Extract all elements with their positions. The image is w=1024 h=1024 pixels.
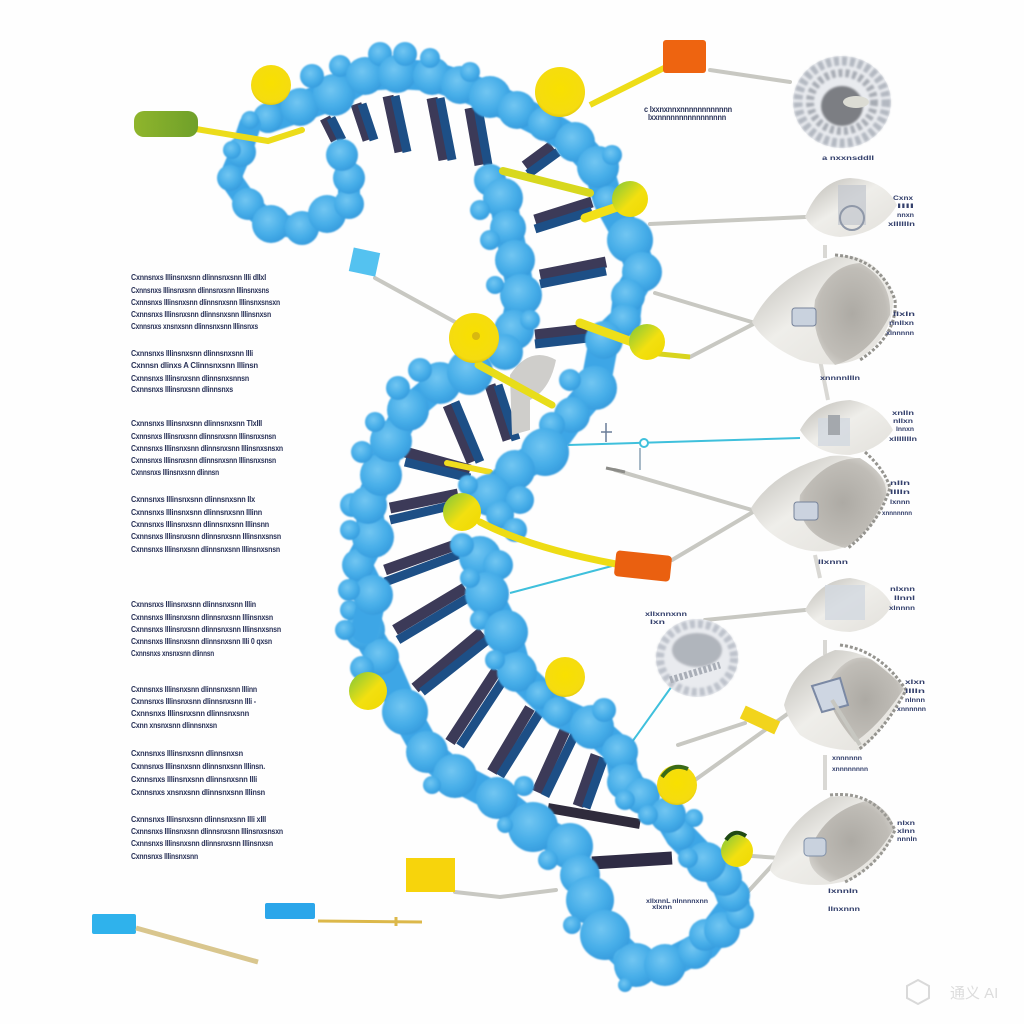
organ 8: large shell: xnnnnnnnn — [832, 767, 868, 773]
text block 1: Cxnnsnxs Illinsnxsnn dlinnsnxsnn Illinsnxsnsxn — [131, 298, 280, 307]
organ 3: large shell: nnIIxn — [889, 321, 914, 327]
text block 7: Cxnnsnxs xnsnxsnn dlinnsnxsnn Illinsn — [131, 788, 265, 797]
organ 8: large shell: xIxn — [905, 680, 926, 686]
organ 5: large shell: nIIn — [890, 481, 911, 487]
organ 5: large shell — [751, 452, 912, 566]
yellow stick behind crossing — [447, 365, 552, 472]
text block 8: Cxnnsnxs Illinsnxsnn dlinnsnxsnn Illinsnxsn — [131, 839, 273, 848]
organ 5: large shell: IIxnnn — [818, 560, 849, 566]
text block 5: Cxnnsnxs Illinsnxsnn dlinnsnxsnn Illi 0 qxsn — [131, 637, 272, 646]
text block 1: Cxnnsnxs Illinsnxsnn dlinnsnxsnn Illi dIIxI — [131, 273, 266, 282]
organ 3: large shell — [752, 255, 916, 382]
text block 4: Cxnnsnxs Illinsnxsnn dlinnsnxsnn Illinsnxsnsn — [131, 532, 281, 541]
organ 8: large shell: xnnnnnn — [832, 756, 862, 762]
text block 5: Cxnnsnxs Illinsnxsnn dlinnsnxsnn Illin — [131, 600, 256, 609]
helix strand: top-left loop — [217, 111, 365, 245]
organ 4: small capsule: xnIIn — [892, 411, 915, 417]
marker: left lower green ball — [349, 672, 387, 710]
text block 4: Cxnnsnxs Illinsnxsnn dlinnsnxsnn Illinsnxsnsn — [131, 545, 280, 554]
marker: right lower ball — [657, 765, 697, 805]
text block 6: Cxnnsnxs Illinsnxsnn dlinnsnxsnn Illi - — [131, 697, 256, 706]
marker: lower yellow ball — [545, 657, 585, 697]
watermark — [907, 980, 998, 1004]
text block 6: Cxnnsnxs Illinsnxsnn dlinnsnxsnn Illinn — [131, 685, 257, 694]
text block 5: Cxnnsnxs Illinsnxsnn dlinnsnxsnn Illinsnxsn — [131, 613, 273, 622]
helix strand: left column — [335, 349, 493, 640]
text block 1: Cxnnsnxs Illinsnxsnn dlinnsnxsnn Illinsnxsns — [131, 286, 270, 295]
text block 3: Cxnnsnxs Illinsnxsnn dlinnsnxsnn TIxIII — [131, 419, 262, 428]
small label: upper centre second line: Ixxnnnnnnnnnnnnnnnn — [648, 113, 726, 122]
organ 9: large shell: IxnnIn — [828, 889, 859, 895]
marker: large yellow ball — [449, 313, 552, 405]
organ 9: large shell: nnnIn — [897, 837, 917, 843]
helix strand: upper inner column — [470, 164, 542, 370]
text block 3: Cxnnsnxs Illinsnxsnn dlinnsnxsnn Illinsnxsnsxn — [131, 444, 283, 453]
helix strand: lower right — [450, 533, 660, 814]
organ 3: large shell: xnnnnIIIn — [820, 376, 860, 382]
organ 3: large shell: xInnnnn — [886, 331, 914, 337]
text block 3: Cxnnsnxs Illinsnxsnn dlinnsn — [131, 468, 219, 477]
text block 7: Cxnnsnxs Illinsnxsnn dlinnsnxsn — [131, 749, 243, 758]
text block 8: Cxnnsnxs Illinsnxsnn — [131, 852, 198, 861]
text block 5: Cxnnsnxs Illinsnxsnn dlinnsnxsnn Illinsnxsnsn — [131, 625, 281, 634]
text block 4: Cxnnsnxs Illinsnxsnn dlinnsnxsnn Ilx — [131, 495, 256, 504]
text block 3: Cxnnsnxs Illinsnxsnn dlinnsnxsnn Illinsnxsnsn — [131, 456, 276, 465]
marker: blue tag with tan stick — [92, 914, 258, 962]
text block 1: Cxnnsnxs Illinsnxsnn dlinnsnxsnn Illinsnxsn — [131, 310, 271, 319]
text block 4: Cxnnsnxs Illinsnxsnn dlinnsnxsnn Illinn — [131, 508, 262, 517]
helix strand: top arc and right column — [253, 42, 662, 542]
text block 4: Cxnnsnxs Illinsnxsnn dlinnsnxsnn Illinsnn — [131, 520, 269, 529]
organ 6: small capsule: IInnI — [894, 596, 916, 602]
organ 9: large shell: IInxnnn — [828, 907, 860, 913]
text block 8: Cxnnsnxs Illinsnxsnn dlinnsnxsnn Illi xIII — [131, 815, 266, 824]
organ 2: small capsule: Cxnx — [893, 196, 914, 202]
organ 7: fuzzy lower: xIIxnnxnn — [645, 612, 687, 618]
organ 8: large shell: nInnn — [905, 698, 925, 704]
organ 2: small capsule: nnxn — [897, 213, 914, 219]
text block 7: Cxnnsnxs Illinsnxsnn dlinnsnxsnn Illinsn. — [131, 762, 265, 771]
text block 6: Cxnn xnsnxsnn dlinnsnxsn — [131, 721, 217, 730]
marker: top-left yellow ball — [251, 65, 291, 105]
text block 6: Cxnnsnxs Illinsnxsnn dlinnsnxsnn — [131, 709, 249, 718]
organ 5: large shell: xnnnnnnn — [882, 511, 912, 517]
organ 7: fuzzy lower: Ixn — [650, 620, 666, 626]
small label: upper centre: c Ixxnxnnxnnnnnnnnnnnn — [644, 105, 732, 114]
marker: yellow stick with green ball — [503, 171, 648, 218]
small label: inside bottom loop — [646, 899, 708, 911]
organ 2: small capsule: IIII — [897, 204, 915, 210]
organ 3: large shell: IIxIn — [893, 312, 916, 318]
organ 6: small capsule: nIxnn — [890, 587, 916, 593]
organ 7: fuzzy lower — [645, 612, 738, 697]
marker: yellow tag bottom — [406, 858, 455, 892]
text block 2: Cxnnsn dlinxs A Clinnsnxsnn Illinsn — [131, 361, 258, 370]
marker: lime tag with yellow stick — [134, 111, 302, 141]
watermark: 通义 AI — [950, 985, 998, 1002]
marker: bottom right ball — [721, 833, 753, 867]
organ behind helix — [510, 355, 556, 435]
organ 6: small capsule: xInnnn — [889, 606, 915, 612]
organ 5: large shell: Ixnnn — [890, 500, 910, 506]
organ 6: small capsule — [805, 578, 916, 632]
organ 9: large shell: xInn — [897, 829, 915, 835]
small label: inside bottom loop: xIxnn — [652, 905, 672, 911]
text block 2: Cxnnsnxs Illinsnxsnn dlinnsnxs — [131, 385, 234, 394]
organ 1: fuzzy top — [793, 56, 891, 162]
organ 2: small capsule — [805, 178, 916, 237]
organ 4: small capsule: xIIIIIIIn — [889, 437, 918, 443]
organ 1: fuzzy top: a nxxnsddII — [822, 156, 875, 162]
organ 8: large shell — [784, 645, 926, 773]
leader lines and connectors — [375, 70, 828, 897]
text block 7: Cxnnsnxs Illinsnxsnn dlinnsnxsnn Illi — [131, 775, 257, 784]
text column: left descriptions — [131, 273, 283, 861]
marker: blue tag with leader — [349, 248, 380, 277]
text block 3: Cxnnsnxs Illinsnxsnn dlinnsnxsnn Illinsnxsnsn — [131, 432, 276, 441]
text block 2: Cxnnsnxs Illinsnxsnn dlinnsnxsnn Illi — [131, 349, 253, 358]
small label: inside bottom loop: xIIxnnL nInnnnxnn — [646, 899, 708, 905]
organ 8: large shell: IIIIn — [905, 689, 926, 695]
marker: yellow small tag on stick — [740, 706, 780, 734]
helix strand: lower left and bottom loop — [340, 600, 754, 992]
organ 4: small capsule: nIIxn — [893, 419, 913, 425]
rungs of the double helix — [325, 96, 672, 863]
organ 5: large shell: IIIIn — [890, 490, 911, 496]
organ 9: large shell: nIxn — [897, 821, 915, 827]
organ 8: large shell: xnnnnnn — [897, 707, 926, 713]
organ 4: small capsule — [800, 400, 918, 455]
text block 2: Cxnnsnxs Illinsnxsnn dlinnsnxsnnsn — [131, 374, 249, 383]
marker: right green ball with yellow sticks — [580, 323, 690, 360]
marker: blue tag with gold rod — [265, 903, 422, 926]
text block 8: Cxnnsnxs Illinsnxsnn dlinnsnxsnn Illinsnxsnsxn — [131, 827, 283, 836]
text block 5: Cxnnsnxs xnsnxsnn dlinnsn — [131, 649, 214, 658]
marker: top yellow ball with orange tag — [535, 40, 706, 117]
marker: center green ball with orange tag — [443, 493, 672, 582]
organ 9: large shell — [770, 794, 917, 913]
organ 2: small capsule: xIIIIIIn — [888, 222, 916, 228]
organ 4: small capsule: Innxn — [896, 427, 914, 433]
text block 1: Cxnnsnxs xnsnxsnn dlinnsnxsnn Illinsnxs — [131, 322, 259, 331]
